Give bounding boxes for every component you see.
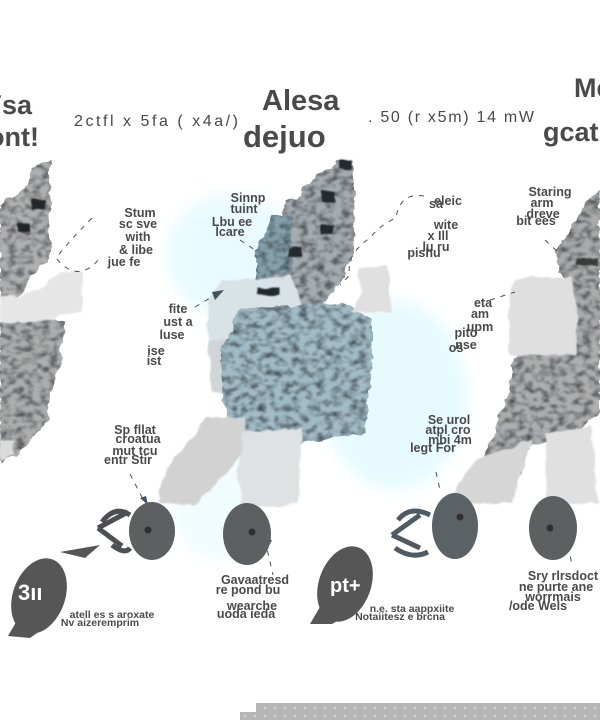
callout: head, left: Stum bbox=[124, 206, 156, 220]
title: centre bbox=[243, 85, 340, 154]
badge: centre dog age bbox=[1, 550, 77, 642]
callout: head, right of centre: eleic bbox=[434, 194, 462, 208]
callout: chest, right dog: pito bbox=[455, 326, 478, 340]
paws: centre dog bbox=[129, 502, 271, 565]
dog: right, cropped bbox=[350, 190, 600, 506]
callout: head, right of centre: x Ill bbox=[428, 229, 448, 243]
callout: head, centre: Lbu ee bbox=[212, 215, 252, 229]
callout: chest, centre bbox=[147, 290, 224, 368]
caption: centre dog: atell es s aroxate bbox=[70, 609, 154, 621]
caption: right dog: n.e. sta aappxiite bbox=[370, 603, 454, 615]
callout: chest, centre: fite bbox=[169, 302, 187, 316]
pale cyan glow behind the centre dog bbox=[166, 193, 467, 560]
callout: front leg, right of centre bbox=[410, 413, 472, 490]
callout: head, right dog: dreve bbox=[526, 207, 560, 221]
callout: front leg, centre dog: Sp fllat bbox=[114, 423, 157, 437]
callout: head, left: with bbox=[124, 230, 150, 244]
callout: chest, centre: ist bbox=[147, 354, 162, 368]
callout: back leg, right dog: /ode Wels bbox=[509, 599, 567, 613]
title: right: gcat bbox=[543, 117, 599, 147]
callout: head, right of centre bbox=[340, 194, 462, 285]
callout: back leg, centre dog bbox=[216, 538, 289, 621]
callout: chest, centre: ust a bbox=[163, 315, 194, 329]
icon: measure symbol, right of centre bbox=[392, 511, 430, 555]
callout: chest, right dog: eta bbox=[474, 296, 493, 310]
callout: front leg, centre dog bbox=[104, 423, 162, 505]
badge: right dog age: pt+ bbox=[330, 575, 361, 597]
callout: head, centre: lcare bbox=[215, 225, 245, 239]
title: centre: Alesa bbox=[262, 85, 340, 117]
callout: head, right dog: bit ees bbox=[516, 214, 556, 228]
callout: chest, right dog: am bbox=[471, 307, 489, 321]
callout: chest, centre: ise bbox=[147, 344, 165, 358]
caption: centre dog: Nv aizeremprim bbox=[61, 617, 139, 629]
icon: measure symbol, centre dog bbox=[60, 511, 130, 558]
callout: front leg, right of centre: atpl cro bbox=[425, 423, 471, 437]
callout: head, centre: Sinnp bbox=[231, 191, 266, 205]
callout: front leg, centre dog: entr Stir bbox=[104, 453, 152, 467]
callout: head, right of centre: wite bbox=[433, 218, 458, 232]
callout: head, right of centre: sa bbox=[429, 197, 444, 211]
callout: head, centre bbox=[212, 191, 266, 250]
dog: centre, blue-tinted bbox=[158, 160, 372, 510]
callout: head, right dog: Staring bbox=[528, 185, 572, 199]
callout: back leg, centre dog: re pond bu bbox=[216, 583, 280, 597]
badge: centre dog age: 3ıı bbox=[18, 580, 42, 605]
badge: right dog age bbox=[307, 538, 383, 630]
caption: centre dog bbox=[61, 609, 154, 629]
dog: left, cropped bbox=[0, 160, 82, 462]
callout: chest, right dog bbox=[449, 292, 515, 355]
dimensions: centre dog: 2ctfl x 5fa ( x4a/) bbox=[74, 113, 238, 130]
callout: chest, right dog: nse bbox=[455, 338, 477, 352]
callout: chest, centre: luse bbox=[159, 328, 185, 342]
callout: chest, right dog: upm bbox=[467, 320, 493, 334]
callout: back leg, centre dog: Gavaatresd bbox=[221, 573, 289, 587]
callout: front leg, right of centre: mbi 4m bbox=[428, 433, 472, 447]
callout: front leg, right of centre: Se urol bbox=[428, 413, 470, 427]
callout: back leg, centre dog: uoda ieda bbox=[217, 607, 276, 621]
callout: front leg, right of centre: legt For bbox=[410, 441, 456, 455]
callout: head, right dog bbox=[516, 185, 572, 252]
title: centre: dejuo bbox=[243, 119, 326, 154]
title: right bbox=[543, 73, 600, 147]
callout: back leg, right dog: ne purte ane bbox=[519, 580, 593, 594]
callout: back leg, centre dog: wearche bbox=[226, 599, 277, 613]
caption: right dog: Notaiitesz e brcna bbox=[355, 611, 445, 623]
callout: back leg, right dog: Sry rlrsdoct bbox=[528, 569, 599, 583]
paws: right dog bbox=[432, 493, 577, 560]
callout: head, centre: tuint bbox=[230, 202, 258, 216]
callout: chest, right dog: os bbox=[449, 341, 463, 355]
footer strip bbox=[240, 703, 600, 720]
callout: back leg, right dog: worrmais bbox=[524, 590, 581, 604]
title: left bbox=[0, 90, 39, 152]
callout: head, right of centre: lu ru bbox=[422, 240, 450, 254]
callout: head, left: sc sve bbox=[119, 217, 157, 231]
callout: head, left: jue fe bbox=[107, 255, 140, 269]
callout: front leg, centre dog: mut tcu bbox=[112, 444, 158, 458]
dimensions: right dog: . 50 (r x5m) 14 mW bbox=[368, 109, 535, 126]
callout: head, right of centre: pishu bbox=[407, 246, 441, 260]
callout: head, left bbox=[56, 206, 157, 272]
callout: front leg, centre dog: croatua bbox=[115, 432, 162, 446]
callout: head, right dog: arm bbox=[531, 196, 553, 210]
caption: right dog bbox=[355, 603, 454, 623]
callout: back leg, right dog bbox=[509, 535, 599, 613]
callout: head, left: & libe bbox=[119, 243, 153, 257]
